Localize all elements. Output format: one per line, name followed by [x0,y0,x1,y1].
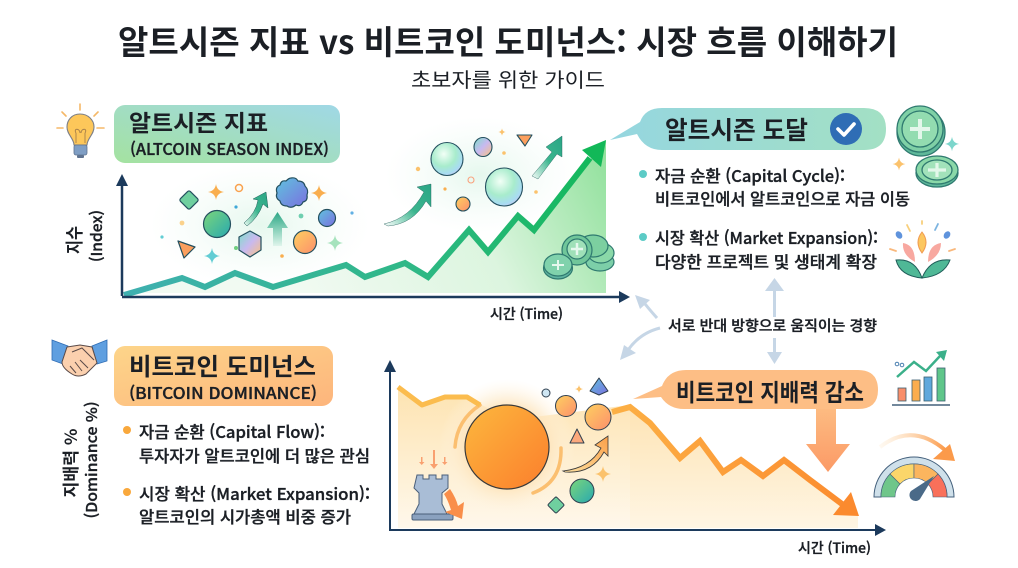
glow behind left bubbles [150,163,370,287]
x axis [122,291,630,303]
icon: green plus coins [893,106,959,187]
arrow: up left [635,295,657,318]
panel: altcoin season index chart [61,117,630,324]
title: 알트시즌 지표 vs 비트코인 도미넌스: 시장 흐름 이해하기 [118,16,898,64]
y axis label: 지수 [61,226,87,254]
arrow: down left [620,328,660,360]
heading: altcoin season index: 알트시즌 지표 [129,104,268,138]
callout: altcoin season reached: 알트시즌 도달 [665,111,808,147]
arcs around sun [455,405,561,493]
line arrowhead [833,492,859,516]
icon: right growth arrows [384,136,562,226]
callout: bitcoin dominance decline: 비트코인 지배력 감소 [676,373,864,408]
arrow: up [765,278,784,317]
y axis [116,174,128,296]
icons: scattered tokens [542,378,611,513]
altcoin line [124,158,590,295]
callout: altcoin season reached [610,108,886,150]
icon: gauge [874,457,954,501]
text block: altcoin bullets: 비트코인에서 알트코인으로 자금 이동 [655,186,910,210]
icon: left growth arrows [244,192,288,246]
text block: altcoin bullets: 시장 확산 (Market Expansion): [655,225,878,249]
heading: bitcoin dominance: 비트코인 도미넌스 [129,347,316,382]
text block: altcoin bullets: 다양한 프로젝트 및 생태계 확장 [655,249,877,273]
text block: bitcoin bullets: 시장 확산 (Market Expansion): [139,481,370,505]
heading: altcoin season index [114,104,340,163]
subtitle: 초보자를 위한 가이드 [411,64,605,93]
y axis [384,360,396,530]
area fill right [630,407,858,528]
icon: sprout flower [890,221,955,278]
sun [465,405,549,489]
text block: bitcoin bullets [123,419,370,528]
icon: bar chart with rising arrow [892,350,950,405]
text block: bitcoin bullets: 알트코인의 시가총액 비중 증가 [139,504,351,528]
icon: check badge [830,113,862,145]
x axis label: 시간 (Time) [490,304,563,324]
glow behind right bubbles [385,117,575,233]
icons: right bubble cluster [416,128,538,211]
icon: coin stack [544,235,614,279]
area fill left [398,388,630,528]
icon: orange rising arrow [563,436,608,472]
icons: left bubble cluster [160,178,354,264]
icon: light bulb [57,104,104,158]
x axis label: 시간 (Time) [798,538,871,558]
text block: bitcoin bullets: 투자자가 알트코인에 더 많은 관심 [139,443,370,467]
heading: bitcoin dominance: (BITCOIN DOMINANCE) [129,380,317,404]
heading: bitcoin dominance [114,346,333,406]
sun glow [439,379,575,515]
x axis [389,524,886,536]
y axis label: dominance: (Dominance %) [81,402,102,518]
text block: altcoin bullets [639,163,910,273]
heading: altcoin season index: (ALTCOIN SEASON INDEX) [130,136,329,160]
y axis label: (Index) [86,210,107,262]
line arrowhead [582,140,606,167]
text block: altcoin bullets: 자금 순환 (Capital Cycle): [655,163,845,187]
area fill under altcoin line [124,140,606,296]
icon: handshake [52,340,107,376]
callout: opposite movement tendency: 서로 반대 방향으로 움직이는 경향 [668,315,877,336]
y axis label: dominance: 지배력 % [57,428,82,498]
panel: bitcoin dominance chart [384,360,886,558]
icon: curved orange arrow [880,435,955,461]
text block: bitcoin bullets: 자금 순환 (Capital Flow): [139,419,325,443]
callout: opposite movement tendency [620,278,877,364]
icon: chess rook [412,450,464,520]
y axis label: dominance [57,402,102,518]
declining line left [398,387,480,405]
arrow: down [767,338,782,364]
declining line right [612,407,842,504]
y axis label [61,210,107,262]
callout: bitcoin dominance decline [633,370,878,472]
